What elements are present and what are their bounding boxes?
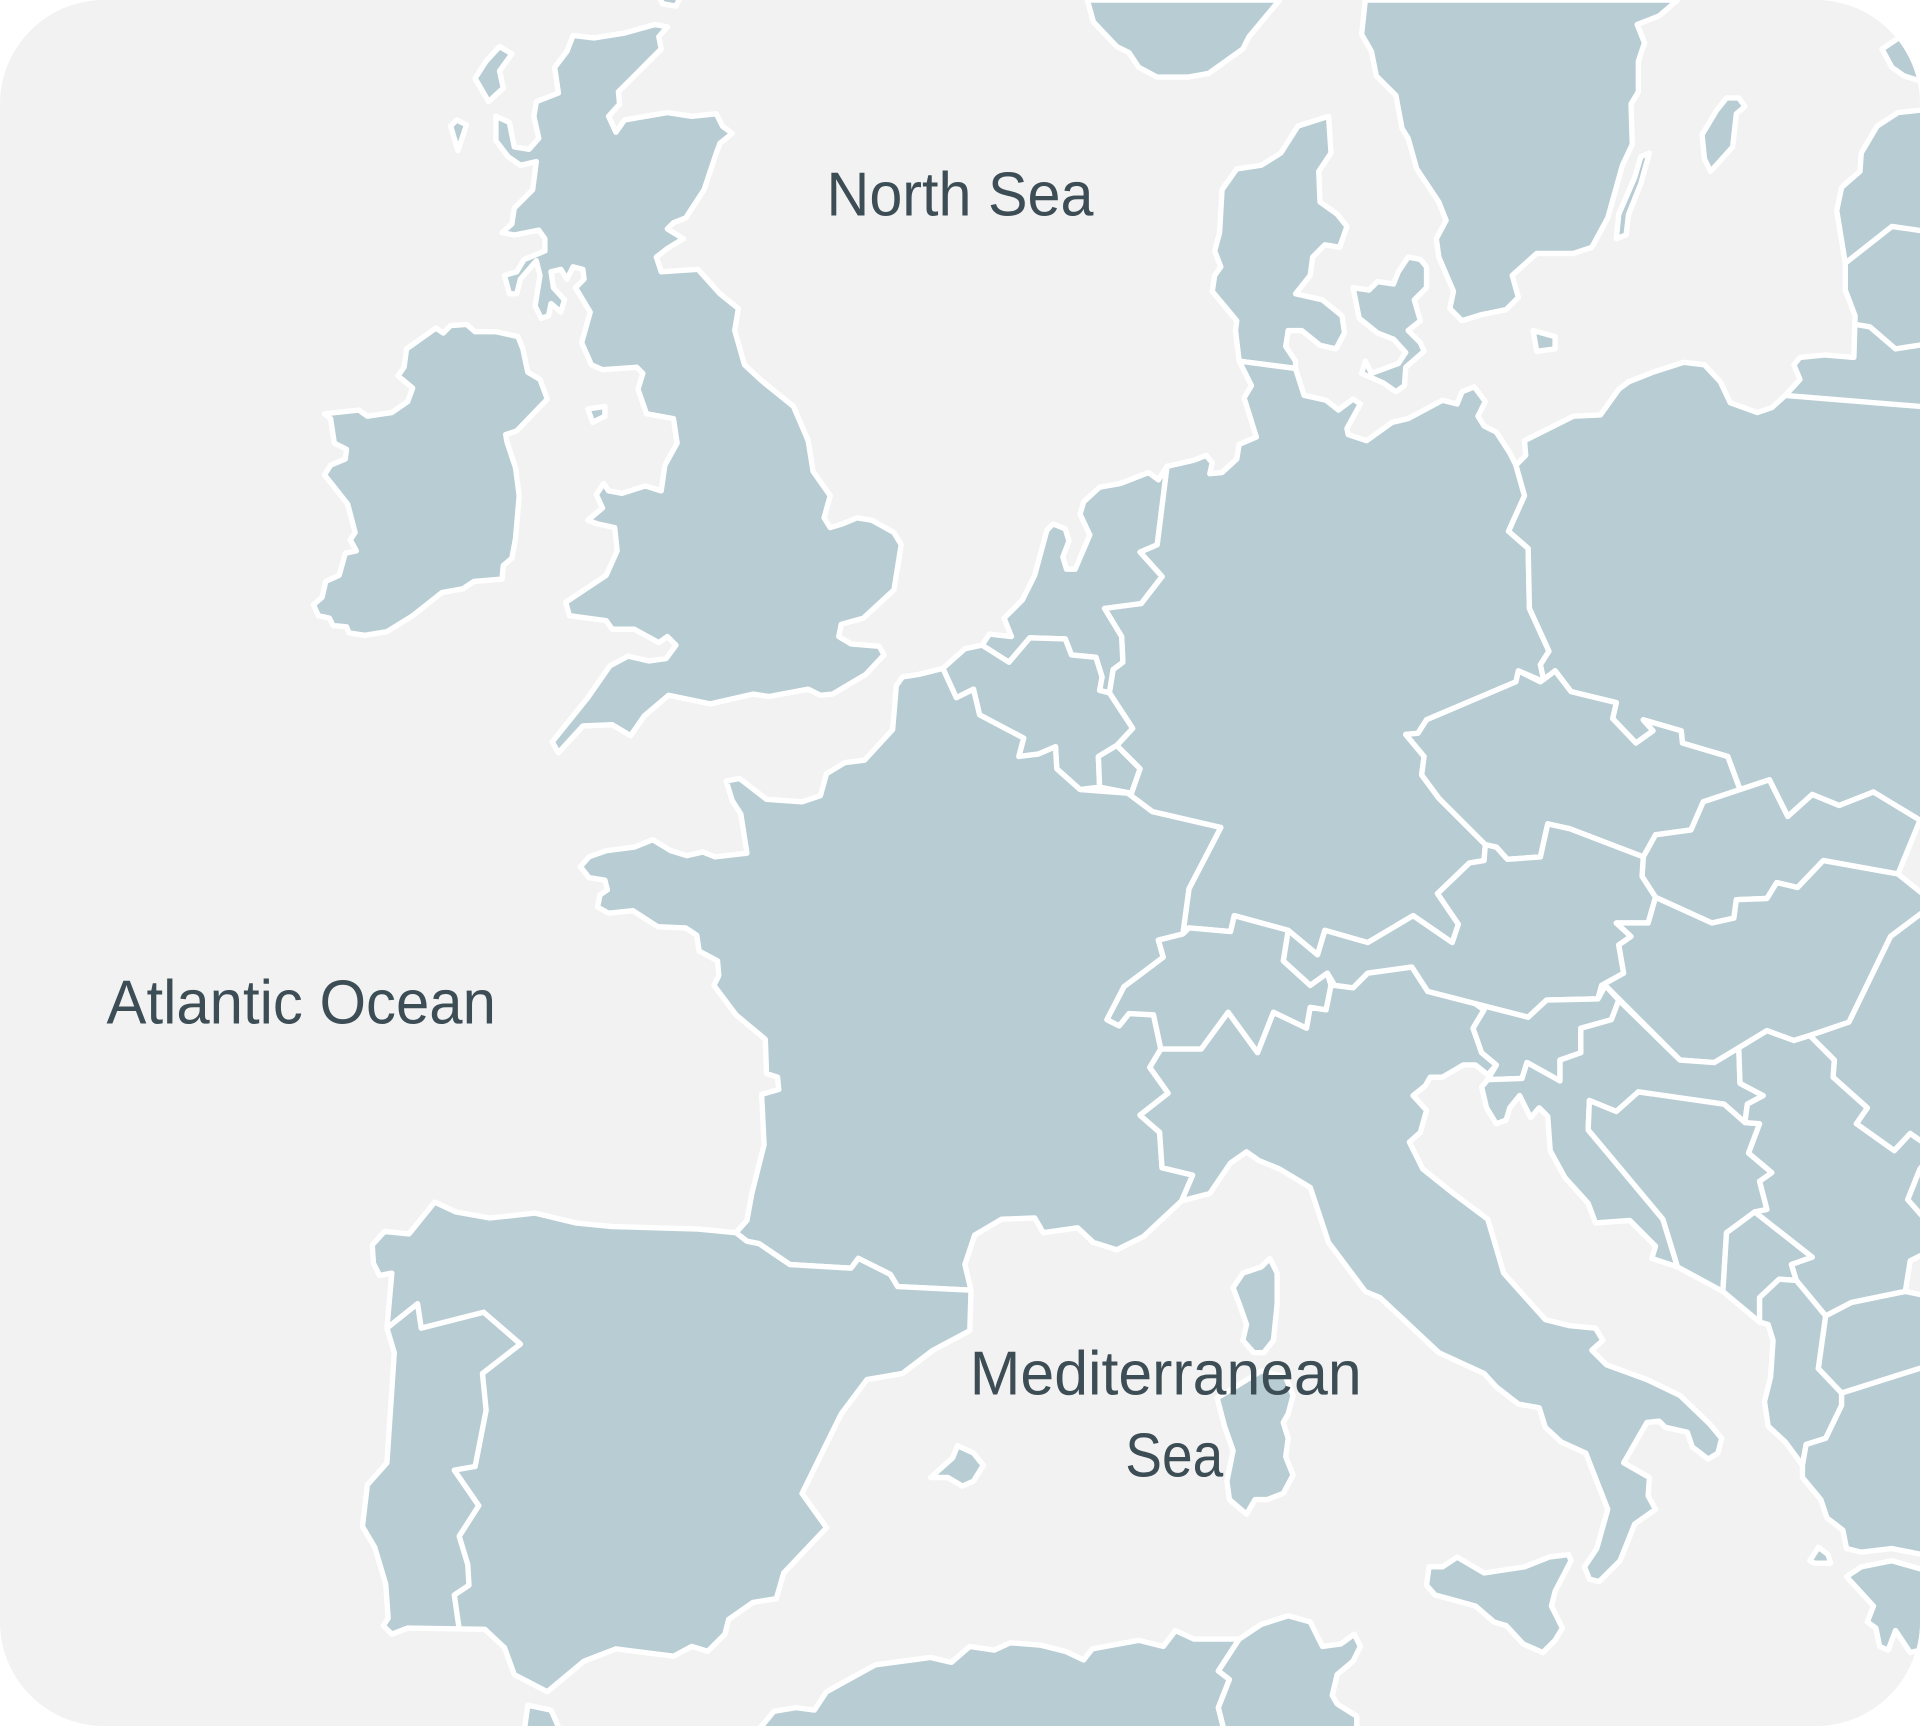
country: Poland and Baltic region bbox=[1509, 110, 1920, 830]
country: Romania bbox=[1810, 903, 1920, 1151]
country: Bulgaria bbox=[1908, 1151, 1920, 1230]
country: Austria bbox=[1283, 824, 1656, 1017]
land: Finland coast bbox=[1882, 37, 1920, 86]
country: Albania bbox=[1760, 1279, 1842, 1465]
country: Czech Republic bbox=[1406, 671, 1740, 859]
country: France bbox=[580, 668, 1221, 1290]
label: Atlantic Ocean: Atlantic Ocean bbox=[107, 967, 496, 1037]
country: Hungary bbox=[1598, 861, 1920, 1063]
island: Shetland fragment bbox=[658, 0, 682, 6]
island: Corsica bbox=[1233, 1258, 1277, 1353]
country: Norway bbox=[1087, 0, 1280, 77]
country: Ireland bbox=[313, 324, 547, 635]
border: Estonia and Latvia bbox=[1845, 226, 1920, 263]
country: Italy bbox=[1140, 967, 1722, 1582]
label: Mediterranean Sea: Sea bbox=[1125, 1420, 1224, 1490]
country: Serbia bbox=[1739, 1031, 1920, 1316]
island: Isle of Man bbox=[588, 406, 605, 422]
island: Bornholm bbox=[1533, 331, 1555, 351]
country: Switzerland bbox=[1107, 916, 1331, 1053]
country: Spain bbox=[362, 1202, 971, 1692]
country: Great Britain bbox=[496, 24, 901, 753]
country: Germany bbox=[1104, 361, 1549, 955]
country: Morocco bbox=[524, 1705, 561, 1726]
country: Greece mainland bbox=[1802, 1364, 1920, 1557]
island: Sardinia bbox=[1217, 1371, 1293, 1514]
country: Algeria bbox=[757, 1631, 1239, 1726]
land: Peloponnese bbox=[1847, 1561, 1920, 1653]
country: Sweden bbox=[1362, 0, 1678, 321]
country: Belgium bbox=[943, 638, 1133, 790]
island: Sicily bbox=[1427, 1555, 1571, 1653]
label: North Sea: North Sea bbox=[827, 159, 1094, 229]
border: Kaliningrad bbox=[1785, 395, 1920, 408]
country: Luxembourg bbox=[1098, 745, 1140, 793]
island: Mallorca bbox=[931, 1446, 983, 1486]
country: Slovakia bbox=[1642, 780, 1920, 923]
country: Denmark bbox=[1212, 116, 1347, 368]
country: Croatia bbox=[1482, 1000, 1763, 1267]
country: Tunisia bbox=[1218, 1616, 1360, 1726]
island: Zealand bbox=[1353, 257, 1427, 392]
island: Outer Hebrides bbox=[451, 120, 467, 151]
country: Netherlands bbox=[982, 466, 1167, 693]
label: Mediterranean Sea: Mediterranean bbox=[970, 1338, 1362, 1408]
country: Montenegro bbox=[1723, 1212, 1812, 1322]
border: Portugal bbox=[387, 1304, 520, 1629]
island: Ionian island bbox=[1810, 1547, 1831, 1563]
country: North Macedonia bbox=[1818, 1291, 1920, 1393]
island: Gotland bbox=[1702, 98, 1745, 171]
country: Bosnia and Herzegovina bbox=[1588, 1092, 1772, 1291]
border: Latvia and Lithuania bbox=[1855, 324, 1920, 349]
country: Slovenia bbox=[1473, 985, 1619, 1081]
island: Inner Hebrides bbox=[475, 47, 512, 102]
island: Oland bbox=[1616, 153, 1649, 239]
